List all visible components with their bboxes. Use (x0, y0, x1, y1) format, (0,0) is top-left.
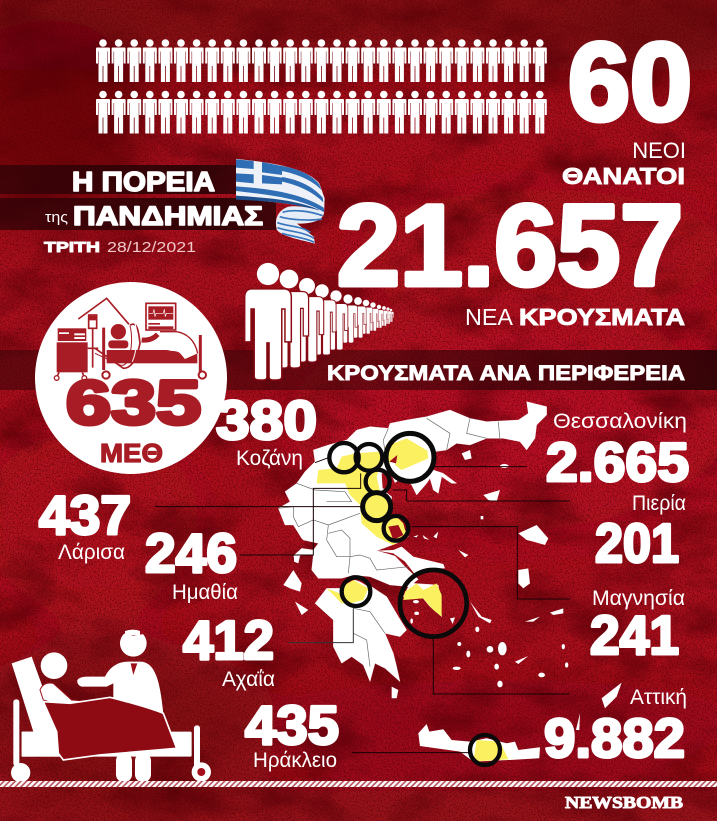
title bands (0, 165, 276, 230)
number: Λάρισα 437: Λάρισα (58, 541, 125, 564)
big number: 60: 60 (568, 21, 692, 144)
sea within circles (352, 455, 403, 587)
section band (0, 350, 717, 390)
highlighted regions (317, 438, 508, 762)
icon row: 60 new deaths pictogram (96, 39, 547, 134)
title: της ΠΑΝΔΗΜΙΑΣ: ΠΑΝΔΗΜΙΑΣ (73, 201, 263, 231)
title: της ΠΑΝΔΗΜΙΑΣ: της (45, 209, 68, 226)
illustration: patient and doctor (11, 629, 211, 782)
divider: hatched strip (0, 781, 717, 787)
label: ΝΕΑ ΚΡΟΥΣΜΑΤΑ (465, 304, 685, 330)
section heading: ΚΡΟΥΣΜΑΤΑ ΑΝΑ ΠΕΡΙΦΕΡΕΙΑ (327, 362, 685, 385)
panel: ICU circle (35, 282, 227, 474)
number: Αχαΐα 412: Αχαΐα (222, 668, 275, 691)
number: Ημαθία 246: Ημαθία (172, 581, 238, 604)
label: ΜΕΘ: ΜΕΘ (100, 438, 163, 468)
Peloponnese (315, 580, 407, 682)
leader lines (155, 458, 570, 753)
islands (283, 450, 622, 730)
label: ΝΕΑ ΚΡΟΥΣΜΑΤΑ: ΝΕΑ (465, 304, 514, 330)
number: Αττική 9.882: Αττική (630, 686, 687, 709)
number: Ηράκλειο 435: 435 (245, 694, 339, 756)
label: ΝΕΟΙ: ΝΕΟΙ (632, 138, 686, 163)
number: Θεσσαλονίκη 2.665: Θεσσαλονίκη (553, 410, 687, 433)
number: 635: 635 (66, 369, 201, 438)
logo: NEWSBOMB: NEWSBOMB (565, 793, 683, 812)
number: Κοζάνη 380: 380 (216, 389, 317, 451)
number: Αττική 9.882: 9.882 (544, 707, 685, 769)
number: Πιερία 201: 201 (595, 512, 679, 574)
number: Αχαΐα 412: 412 (183, 609, 274, 671)
Crete (418, 724, 540, 762)
icon: ICU bed (54, 298, 206, 380)
label: ΝΕΑ ΚΡΟΥΣΜΑΤΑ: ΚΡΟΥΣΜΑΤΑ (519, 304, 685, 330)
number: Ηράκλειο 435: Ηράκλειο (253, 749, 337, 772)
date (44, 239, 196, 256)
number: Πιερία 201: Πιερία (632, 492, 686, 515)
region circles (329, 433, 500, 765)
number: Ημαθία 246: 246 (145, 522, 237, 584)
date: ΤΡΙΤΗ (44, 239, 100, 256)
number: Μαγνησία 241: 241 (590, 604, 679, 666)
map of Greece (155, 402, 622, 765)
number: Κοζάνη 380 (216, 389, 317, 470)
region borders (278, 418, 500, 667)
title: Η ΠΟΡΕΙΑ: Η ΠΟΡΕΙΑ (72, 166, 215, 197)
mainland (278, 402, 547, 617)
label: ΘΑΝΑΤΟΙ: ΘΑΝΑΤΟΙ (562, 163, 685, 189)
icon: queue of people (245, 263, 394, 380)
number: Κοζάνη 380: Κοζάνη (236, 447, 303, 470)
number: Μαγνησία 241: Μαγνησία (592, 587, 685, 610)
date: 28/12/2021 (107, 239, 196, 256)
big number: 21.657: 21.657 (337, 182, 683, 310)
number: Θεσσαλονίκη 2.665: 2.665 (546, 431, 689, 493)
icon: Greek flag ribbon (236, 159, 325, 244)
number: Λάρισα 437: 437 (39, 484, 131, 546)
Evia (377, 547, 445, 577)
